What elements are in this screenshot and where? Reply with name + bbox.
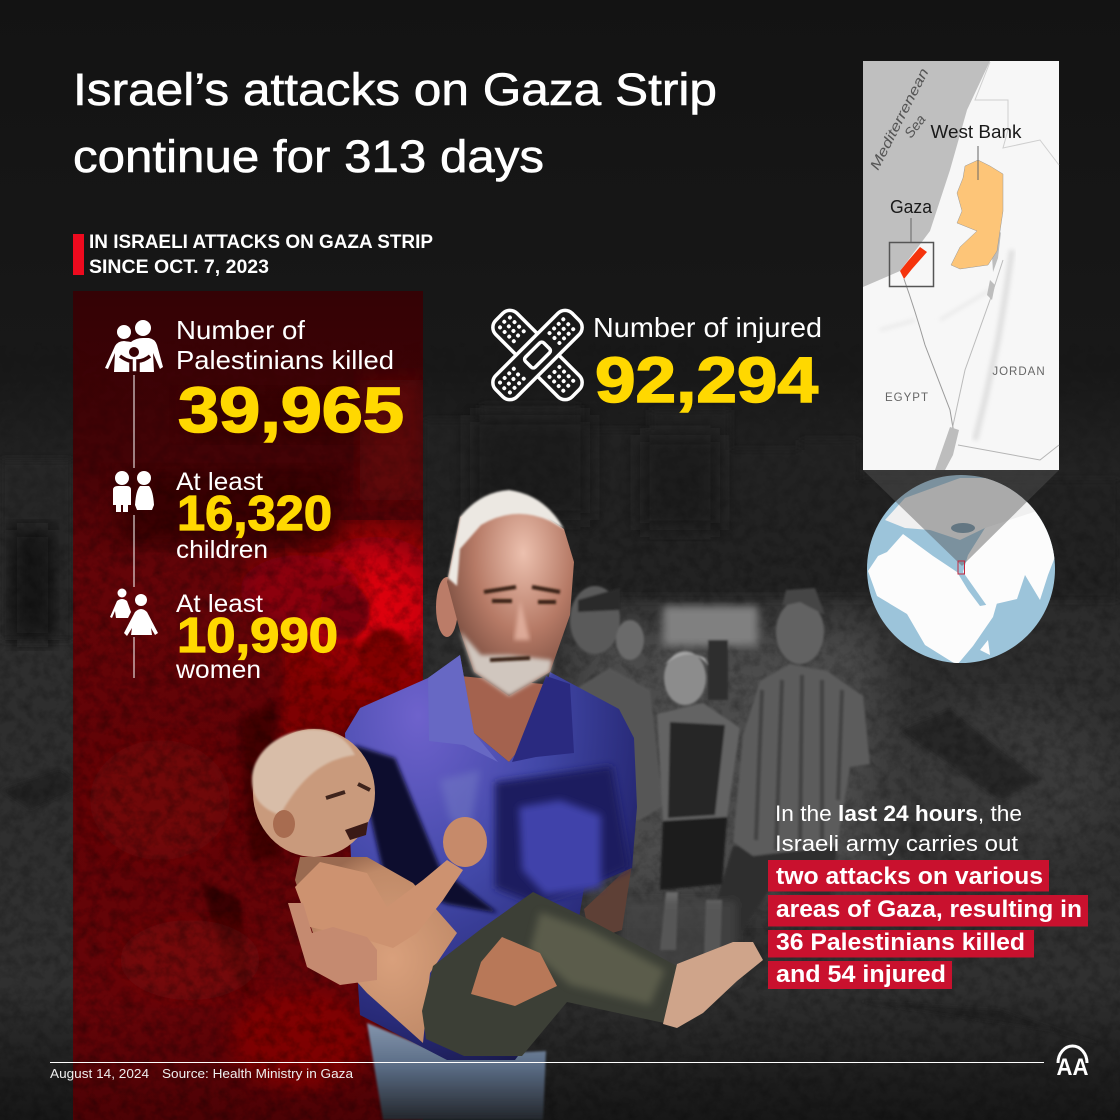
man: shirt collar and shading — [354, 655, 629, 913]
map: labels: Sea — [901, 111, 929, 141]
callout: last 24 hours — [768, 801, 1088, 989]
map: West Bank region — [951, 160, 1003, 269]
icon: children — [113, 471, 154, 512]
child: foot — [663, 942, 763, 1028]
stat: children: 16,320 — [177, 487, 332, 541]
background photo: rubble landscape — [0, 400, 1120, 1088]
man: neck — [460, 676, 543, 762]
subheading with red bar: SINCE OCT. 7, 2023 — [89, 257, 269, 278]
man: jeans — [367, 1023, 546, 1120]
subheading with red bar — [73, 232, 433, 278]
map: terrain and borders — [880, 62, 1059, 460]
callout: highlighted text block: and 54 injured — [776, 961, 946, 988]
man: blue polo shirt — [345, 655, 637, 1060]
timeline connector lines — [133, 375, 135, 678]
map: labels: EGYPT — [885, 392, 929, 404]
map: labels: Gaza — [890, 197, 933, 217]
stat: children — [176, 468, 332, 564]
stat: women: At least — [176, 590, 263, 618]
globe — [863, 470, 1060, 665]
stat: Palestinians killed: Palestinians killed — [176, 345, 394, 375]
callout: highlighted text block: 36 Palestinians killed — [776, 929, 1025, 956]
photo: old man carrying injured child — [252, 490, 763, 1120]
callout: highlighted text block: two attacks on various — [776, 863, 1043, 890]
man: left hand — [288, 903, 377, 985]
map: Gaza Strip — [900, 247, 927, 279]
subheading with red bar: IN ISRAELI ATTACKS ON GAZA STRIP — [89, 232, 433, 253]
icon: women — [110, 588, 158, 636]
footer: date and source — [50, 1067, 353, 1081]
photo: people in the background crowd — [570, 586, 870, 985]
child: fist — [443, 817, 487, 867]
stat: women — [175, 590, 338, 684]
child: arm — [295, 860, 463, 948]
man: right hand — [471, 937, 557, 1006]
child: crying mouth and eyes — [345, 822, 368, 840]
globe: Gaza marker — [958, 561, 964, 574]
man: white beard — [460, 631, 552, 696]
icon: family — [105, 320, 163, 373]
callout: highlighted text block — [768, 860, 1088, 989]
child: trouser mud — [530, 912, 665, 1005]
stat: number of injured — [593, 312, 822, 416]
icon: crossed bandages — [489, 306, 586, 404]
stat: Palestinians killed: Number of — [176, 315, 306, 345]
title — [73, 64, 717, 182]
stat: Palestinians killed: 39,965 — [178, 374, 404, 446]
map: labels: Mediterrenean — [866, 65, 932, 172]
man: nose highlight — [514, 600, 530, 640]
map: Gaza frame — [890, 242, 934, 286]
map: labels: West Bank — [930, 122, 1023, 142]
man: brow eyes nose mouth — [484, 587, 560, 660]
title: continue for 313 days — [73, 131, 544, 182]
footer: date and source: August 14, 2024 — [50, 1067, 149, 1081]
stat: number of injured: 92,294 — [595, 344, 818, 416]
callout: last 24 hours: In the last 24 hours, the — [775, 801, 1022, 826]
child: head — [253, 729, 375, 857]
icon: AA logo: AA — [1056, 1054, 1088, 1081]
globe: projection cone from map — [863, 470, 1059, 566]
stat: women: women — [175, 656, 261, 684]
child: torso — [295, 857, 457, 1043]
panel: red tinted photo column — [73, 291, 450, 1120]
stat: number of injured: Number of injured — [593, 312, 822, 343]
stat: women: 10,990 — [177, 609, 338, 663]
footer: date and source: Source: Health Ministry in Gaza — [162, 1067, 353, 1081]
map: Gaza and West Bank locator — [863, 61, 1059, 470]
stat: children: children — [176, 536, 268, 564]
map: Dead Sea and Gulf of Aqaba — [935, 232, 1001, 470]
callout: highlighted text block: areas of Gaza, resulting in — [776, 896, 1082, 923]
title: Israel’s attacks on Gaza Strip — [73, 64, 717, 115]
man: face — [447, 492, 574, 696]
map: Mediterranean Sea — [863, 61, 990, 287]
map: leader lines — [911, 146, 978, 242]
callout: last 24 hours: Israeli army carries out — [775, 831, 1019, 856]
child: ear — [273, 810, 295, 838]
globe: land masses — [868, 478, 1060, 665]
man: forearm — [584, 864, 632, 940]
map: labels — [866, 65, 1046, 404]
stat: children: At least — [176, 468, 263, 496]
footer rule — [50, 1062, 1044, 1063]
child: trousers — [422, 892, 677, 1056]
map: labels: JORDAN — [992, 366, 1046, 378]
man: ear — [436, 577, 458, 637]
stat: Palestinians killed — [176, 315, 404, 446]
man: white hair — [448, 490, 564, 586]
child: hair — [252, 730, 355, 815]
